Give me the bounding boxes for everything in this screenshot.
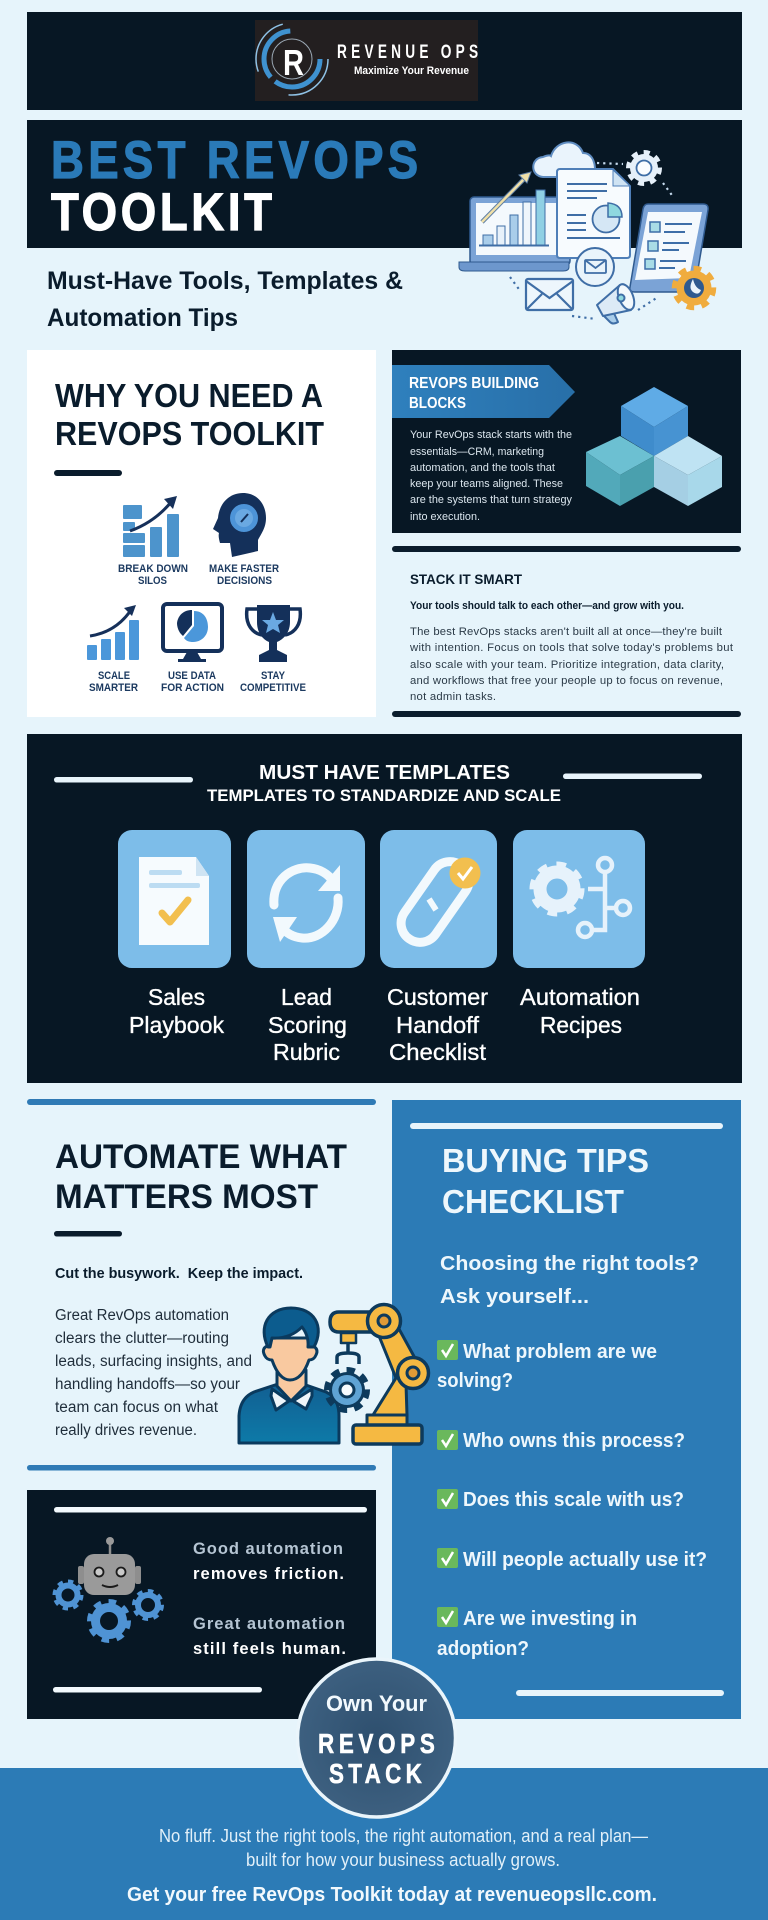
heading: TEMPLATES TO STANDARDIZE AND SCALE (207, 786, 561, 805)
label: stay competitive (240, 670, 306, 694)
panel: why you need a revops toolkit (27, 350, 376, 717)
icon: mail circle (576, 248, 614, 286)
quote: great automation (193, 1615, 346, 1658)
title: TOOLKIT (51, 183, 272, 242)
label: use data for action: USE DATA (168, 670, 216, 682)
subtitle: Must-Have Tools, Templates & (47, 267, 403, 295)
body text: not admin tasks. (410, 691, 496, 703)
footer tagline: No fluff. Just the right tools, the right automation, and a real plan— (159, 1826, 648, 1846)
icon: gear and nodes (533, 858, 630, 937)
icon: envelope (526, 279, 573, 310)
label: Handoff (396, 1012, 479, 1038)
label: Checklist (389, 1039, 486, 1065)
body text (55, 1307, 252, 1439)
checklist item 4: Will people actually use it? (463, 1549, 707, 1571)
banner heading: BLOCKS (409, 395, 466, 412)
panel: buying tips checklist (392, 1100, 741, 1719)
label: scale smarter (89, 670, 138, 694)
heading (55, 1138, 347, 1216)
title: BEST REVOPS (51, 131, 418, 190)
body text: clears the clutter—routing (55, 1330, 229, 1347)
label (268, 984, 347, 1065)
card: sales playbook (118, 830, 231, 1038)
label: scale smarter: SCALE (98, 670, 130, 682)
logo: R (283, 42, 304, 83)
body text: keep your teams aligned. These (410, 478, 563, 490)
body text (409, 626, 734, 703)
heading: AUTOMATE WHAT (55, 1138, 347, 1176)
label: Automation (520, 984, 640, 1010)
banner heading: REVOPS BUILDING (409, 375, 539, 392)
icon: robot with gears (55, 1537, 162, 1640)
body text: and workflows that free your people up to focus on revenue, (410, 675, 723, 687)
body text: essentials—CRM, marketing (410, 446, 544, 458)
quote: great automation: Great automation (193, 1615, 345, 1633)
checklist item 2: Who owns this process? (463, 1430, 685, 1452)
icon: make faster decisions (213, 493, 266, 557)
panel: logo header (27, 12, 742, 110)
label: Scoring (268, 1012, 347, 1038)
checklist item 5: adoption? (437, 1638, 529, 1660)
heading: CHECKLIST (442, 1183, 624, 1220)
checklist item 1: What problem are we (463, 1341, 657, 1363)
illustration: person and robot arm (239, 1304, 428, 1444)
checklist item 3: Does this scale with us? (463, 1489, 684, 1511)
icon: document with pie chart (557, 169, 630, 258)
heading (207, 761, 561, 805)
body text: leads, surfacing insights, and (55, 1353, 252, 1370)
quote: great automation: still feels human. (193, 1640, 346, 1658)
body text: also scale with your team. Prioritize integration, data clarity, (410, 659, 724, 671)
label: stay competitive: STAY (261, 670, 286, 682)
quote: good automation: Good automation (193, 1540, 343, 1558)
label: make faster decisions: MAKE FASTER (209, 563, 279, 575)
label: Playbook (129, 1012, 224, 1038)
body text: Your RevOps stack starts with the (410, 429, 572, 441)
icon: tag with check badge (394, 854, 480, 950)
heading: MATTERS MOST (55, 1178, 318, 1216)
icon: person (239, 1308, 339, 1443)
label: Rubric (273, 1039, 340, 1065)
icon: gear (628, 152, 660, 184)
heading (55, 377, 324, 452)
icon: connector dots (510, 163, 674, 319)
checklist item 1 (437, 1340, 657, 1392)
icon: megaphone (597, 282, 638, 324)
banner heading (392, 365, 575, 418)
label: Recipes (540, 1012, 622, 1038)
label (387, 984, 488, 1065)
badge: own your revops stack (298, 1659, 456, 1817)
body text: automation, and the tools that (410, 462, 556, 474)
body text: really drives revenue. (55, 1422, 197, 1439)
badge: own your revops stack: STACK (329, 1759, 422, 1790)
heading: STACK IT SMART (410, 571, 522, 587)
badge: own your revops stack: REVOPS (318, 1729, 435, 1760)
label: Sales (148, 984, 205, 1010)
panel: revops building blocks (392, 350, 741, 533)
footer tagline: built for how your business actually grows. (246, 1850, 560, 1870)
panel: must have templates (27, 734, 742, 1083)
label: Lead (281, 984, 332, 1010)
logo: REVENUE OPS (337, 41, 478, 63)
icon: stacked cubes (586, 387, 722, 506)
label: scale smarter: SMARTER (89, 682, 138, 694)
lead sentence: Your tools should talk to each other—and grow with you. (410, 600, 684, 612)
label: use data for action (161, 670, 224, 694)
panel: good automation vs great automation (27, 1490, 376, 1719)
body text (410, 429, 572, 523)
icon: gear (328, 1371, 366, 1409)
footer tagline (159, 1826, 648, 1870)
icon: refresh arrows (273, 865, 340, 942)
checklist item 5: Are we investing in (463, 1608, 637, 1630)
icon: break down silos (123, 496, 179, 557)
label: stay competitive: COMPETITIVE (240, 682, 306, 694)
icon: orange gear (675, 269, 713, 307)
body text: team can focus on what (55, 1399, 219, 1416)
quote: good automation: removes friction. (193, 1565, 344, 1583)
body text: with intention. Focus on tools that solve today's problems but (409, 642, 734, 654)
card: automation recipes (513, 830, 645, 1038)
subtitle: Automation Tips (47, 304, 238, 332)
body text: Great RevOps automation (55, 1307, 229, 1324)
panel: stack it smart (392, 546, 741, 717)
heading: MUST HAVE TEMPLATES (259, 761, 510, 784)
footer band (0, 1768, 768, 1920)
label: break down silos (118, 563, 188, 587)
card: customer handoff checklist (380, 830, 497, 1065)
label: make faster decisions: DECISIONS (217, 575, 272, 587)
panel: automate what matters most (27, 1099, 428, 1470)
body text: handling handoffs—so your (55, 1376, 240, 1393)
label (520, 984, 640, 1038)
intro question: Choosing the right tools? (440, 1253, 699, 1275)
body text: The best RevOps stacks aren't built all at once—they're built (410, 626, 723, 638)
icon: document check (139, 857, 209, 945)
intro question: Ask yourself... (440, 1286, 589, 1308)
icon: robot arm (330, 1304, 428, 1444)
panel: hero (27, 120, 742, 248)
intro question (440, 1253, 699, 1308)
title (51, 131, 418, 242)
body text: are the systems that turn strategy (410, 494, 572, 506)
checklist item 1: solving? (437, 1370, 513, 1392)
label: Customer (387, 984, 488, 1010)
heading: WHY YOU NEED A (55, 377, 323, 414)
logo (255, 20, 478, 101)
label: use data for action: FOR ACTION (161, 682, 224, 694)
call to action: Get your free RevOps Toolkit today at revenueopsllc.com. (127, 1883, 657, 1906)
icon: tablet checklist (630, 204, 708, 292)
checklist item 5 (437, 1607, 637, 1660)
icon: cloud (533, 142, 595, 177)
badge: own your revops stack: Own Your (326, 1691, 427, 1716)
heading: REVOPS TOOLKIT (55, 415, 324, 452)
subtitle (47, 267, 403, 332)
heading: BUYING TIPS (442, 1142, 649, 1179)
quote: good automation (193, 1540, 344, 1583)
lead sentence: Cut the busywork. Keep the impact. (55, 1265, 303, 1282)
icon: use data for action (163, 604, 222, 662)
label: break down silos: SILOS (138, 575, 167, 587)
body text: into execution. (410, 511, 480, 523)
icon: scale smarter (87, 605, 139, 660)
label: break down silos: BREAK DOWN (118, 563, 188, 575)
logo: Maximize Your Revenue (354, 65, 469, 77)
icon: laptop with chart (459, 172, 570, 271)
heading (442, 1142, 649, 1220)
label (129, 984, 224, 1038)
label: make faster decisions (209, 563, 279, 587)
hero illustration: tools and workflows (459, 142, 713, 324)
icon: stay competitive (247, 605, 300, 662)
card: lead scoring rubric (247, 830, 365, 1065)
